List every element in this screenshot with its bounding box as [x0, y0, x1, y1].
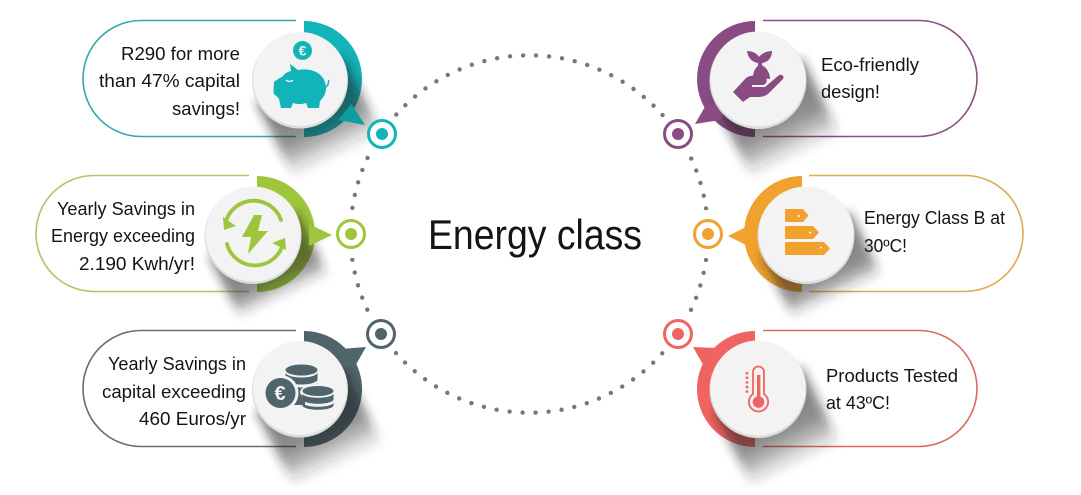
dotted ring — [327, 55, 732, 413]
icon: energy cycle — [223, 201, 286, 265]
icon: coins — [262, 364, 336, 411]
icon: coins: € — [274, 383, 286, 405]
icon: energy class bars — [785, 209, 830, 255]
marker: orange — [694, 220, 722, 248]
marker: green — [338, 220, 364, 248]
marker: teal — [368, 120, 396, 148]
text: yearly capital savings: capital exceeding — [102, 382, 246, 402]
icon: piggy bank — [274, 41, 329, 108]
text: R290 savings: savings! — [172, 99, 240, 119]
text: products tested: Products Tested — [826, 366, 958, 386]
marker: red — [664, 320, 692, 348]
panel: eco-friendly design — [695, 20, 977, 190]
text: products tested: at 43ºC! — [826, 393, 890, 413]
text: R290 savings: R290 for more — [121, 44, 240, 64]
marker: slate — [368, 320, 394, 348]
text: eco-friendly design — [821, 55, 919, 102]
panel: products tested — [693, 330, 977, 495]
text: energy class B — [864, 208, 1005, 256]
panel: energy class B — [728, 176, 1023, 320]
text: yearly capital savings — [102, 354, 246, 429]
text: R290 savings — [99, 44, 240, 119]
title: Energy class — [428, 211, 642, 258]
text: energy class B: 30ºC! — [864, 236, 907, 256]
text: eco-friendly design: design! — [821, 82, 880, 102]
text: products tested — [826, 366, 958, 413]
text: R290 savings: than 47% capital — [99, 71, 240, 91]
marker: purple — [664, 120, 692, 148]
text: yearly energy savings — [51, 199, 195, 274]
icon: plant in hand — [733, 51, 784, 102]
panel: yearly energy savings — [36, 176, 332, 320]
text: yearly capital savings: 460 Euros/yr — [139, 409, 246, 429]
panel: R290 savings — [83, 20, 388, 190]
text: yearly energy savings: Yearly Savings in — [57, 199, 195, 219]
icon: thermometer — [747, 367, 768, 411]
text: energy class B: Energy Class B at — [864, 208, 1005, 228]
text: eco-friendly design: Eco-friendly — [821, 55, 919, 75]
icon: piggy bank: € — [299, 42, 307, 58]
text: yearly energy savings: 2.190 Kwh/yr! — [79, 254, 195, 274]
text: yearly capital savings: Yearly Savings in — [108, 354, 246, 374]
text: yearly energy savings: Energy exceeding — [51, 226, 195, 246]
panel: yearly capital savings — [83, 330, 388, 495]
